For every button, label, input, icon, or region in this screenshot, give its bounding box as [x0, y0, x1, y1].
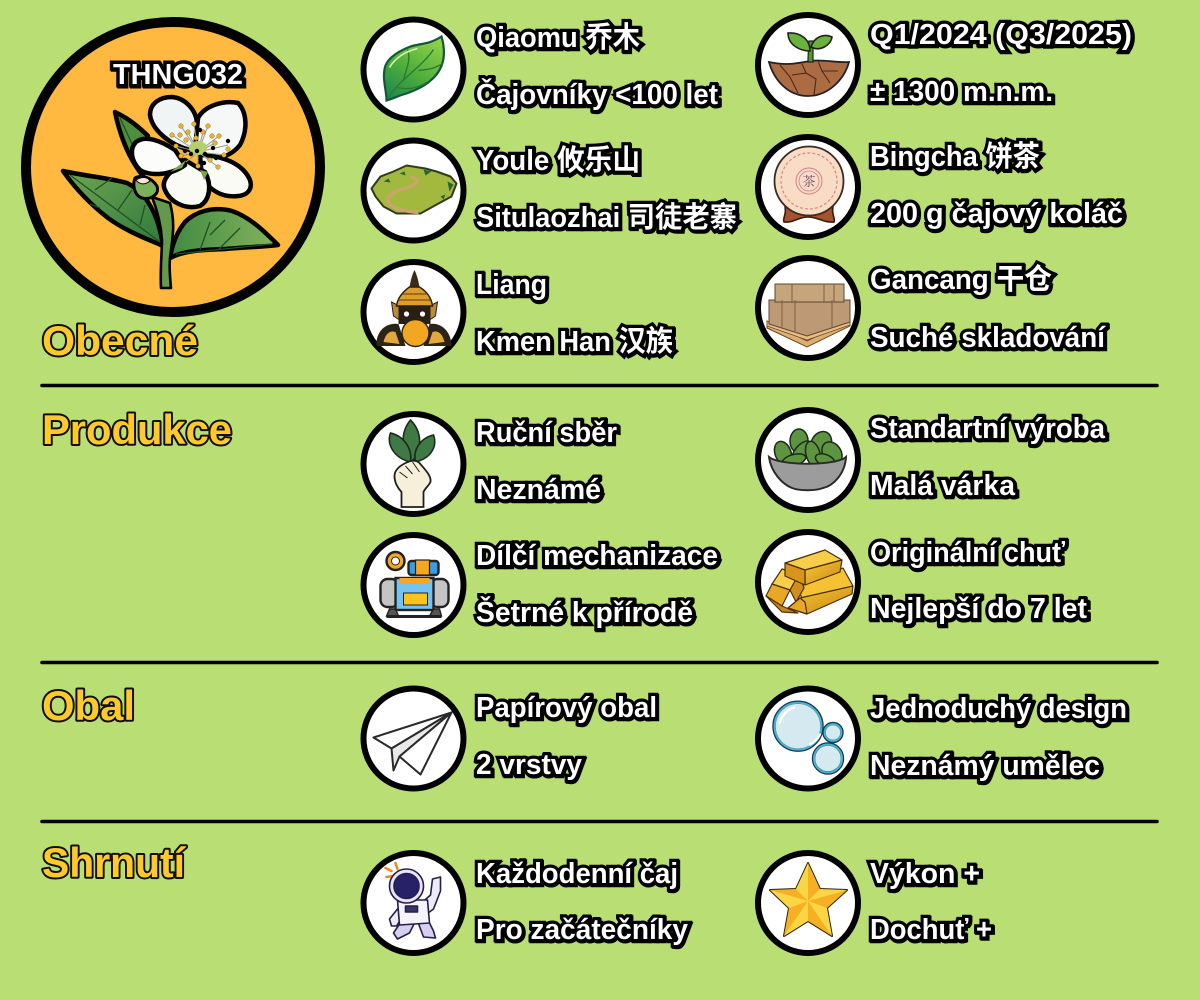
text: Liang: Liang: [476, 269, 547, 301]
icon: green leaf: [364, 20, 464, 120]
text: Ruční sběr: Neznámé: [476, 474, 601, 506]
text: Standartní výroba: Malá várka: [870, 470, 1016, 502]
flower stamens: [170, 122, 230, 169]
text: Youle: Situlaozhai 司徒老寨: [476, 201, 737, 234]
icon: machine: [364, 535, 464, 635]
text: Liang: Kmen Han 汉族: [476, 325, 673, 358]
heading: Produkce: Produkce: [42, 406, 232, 453]
icon: astronaut: [364, 853, 464, 953]
badge: flower emblem: [26, 22, 320, 312]
text: Výkon, Dochuť: Výkon +: [870, 858, 980, 890]
text: Výkon, Dochuť: Dochuť +: [870, 914, 992, 946]
icon: hand holding leaves: [364, 414, 464, 514]
item: design: [758, 688, 1127, 788]
text: Každodenní čaj: [476, 858, 688, 946]
text: Bingcha: [870, 140, 1123, 230]
text: Originální chuť: Nejlepší do 7 let: [870, 593, 1087, 625]
text: harvest and altitude: Q1/2024 (Q3/2025): [870, 19, 1132, 51]
text: Papírový obal: 2 vrstvy: [476, 749, 582, 781]
text: Jednoduchý design: [870, 693, 1127, 782]
text: Papírový obal: Papírový obal: [476, 692, 657, 724]
text: Youle: [476, 144, 737, 234]
item: daily tea: [364, 853, 688, 953]
heading: Shrnutí: Shrnutí: [42, 839, 186, 886]
text: Qiaomu: Qiaomu 乔木: [476, 21, 640, 54]
icon: sprout in soil: [758, 15, 858, 115]
item: picking: [364, 414, 617, 514]
icon: paper plane: [364, 688, 464, 788]
icon: guardian figure: [364, 262, 464, 362]
text: harvest and altitude: ± 1300 m.n.m.: [870, 76, 1053, 108]
text: Výkon, Dochuť: [870, 858, 992, 946]
text: Ruční sběr: [476, 417, 617, 506]
icon: mountain terrain: [364, 140, 464, 240]
text: Standartní výroba: Standartní výroba: [870, 413, 1106, 445]
text: Liang: [476, 269, 673, 358]
text: Gancang: Gancang 干仓: [870, 263, 1052, 296]
text: Papírový obal: [476, 692, 657, 781]
badge code: THNG032: [113, 59, 243, 91]
heading: Obecné: Obecné: [42, 317, 198, 364]
text: Originální chuť: [870, 537, 1087, 625]
item: mountain: [364, 140, 737, 240]
item: mechanization: [364, 535, 718, 635]
text: Dílčí mechanizace: [476, 540, 718, 629]
text: Gancang: [870, 263, 1106, 354]
text: Originální chuť: Originální chuť: [870, 537, 1065, 569]
text: Youle: Youle 攸乐山: [476, 144, 640, 177]
text: Jednoduchý design: Neznámý umělec: [870, 750, 1100, 782]
icon: boxes on pallet: [758, 258, 858, 358]
text: Qiaomu: Čajovníky <100 let: [476, 77, 718, 111]
text: Bingcha: 200 g čajový koláč: [870, 198, 1123, 230]
icon: bingcha tea cake: 茶: [802, 171, 816, 190]
text: Každodenní čaj: Každodenní čaj: [476, 858, 678, 890]
text: Dílčí mechanizace: Šetrné k přírodě: [476, 595, 693, 629]
heading: Obal: Obal: [42, 682, 135, 729]
item: producer: [364, 262, 673, 362]
icon: bingcha tea cake: [758, 137, 858, 237]
item: storage: [758, 258, 1106, 358]
icon: gold bars: [758, 532, 858, 632]
text: Každodenní čaj: Pro začátečníky: [476, 914, 688, 946]
text: Ruční sběr: Ruční sběr: [476, 417, 617, 449]
item: flavor: [758, 532, 1087, 632]
text: Gancang: Suché skladování: [870, 322, 1106, 354]
text: Bingcha: Bingcha 饼茶: [870, 140, 1040, 173]
text: Jednoduchý design: Jednoduchý design: [870, 693, 1127, 725]
item: tea cake: [758, 137, 1123, 237]
icon: bubbles: [758, 688, 858, 788]
item: processing: [758, 410, 1106, 510]
text: Qiaomu: [476, 21, 718, 111]
text: harvest and altitude: [870, 19, 1132, 108]
icon: tea flower: [63, 97, 278, 288]
text: Dílčí mechanizace: Dílčí mechanizace: [476, 540, 718, 572]
item: tree type: [364, 20, 718, 120]
item: wrapper: [364, 688, 657, 788]
item: rating: [758, 853, 992, 953]
item: harvest date: [758, 15, 1132, 115]
icon: bowl of leaves: [758, 410, 858, 510]
text: Standartní výroba: [870, 413, 1106, 502]
icon: gold star: [758, 853, 858, 953]
